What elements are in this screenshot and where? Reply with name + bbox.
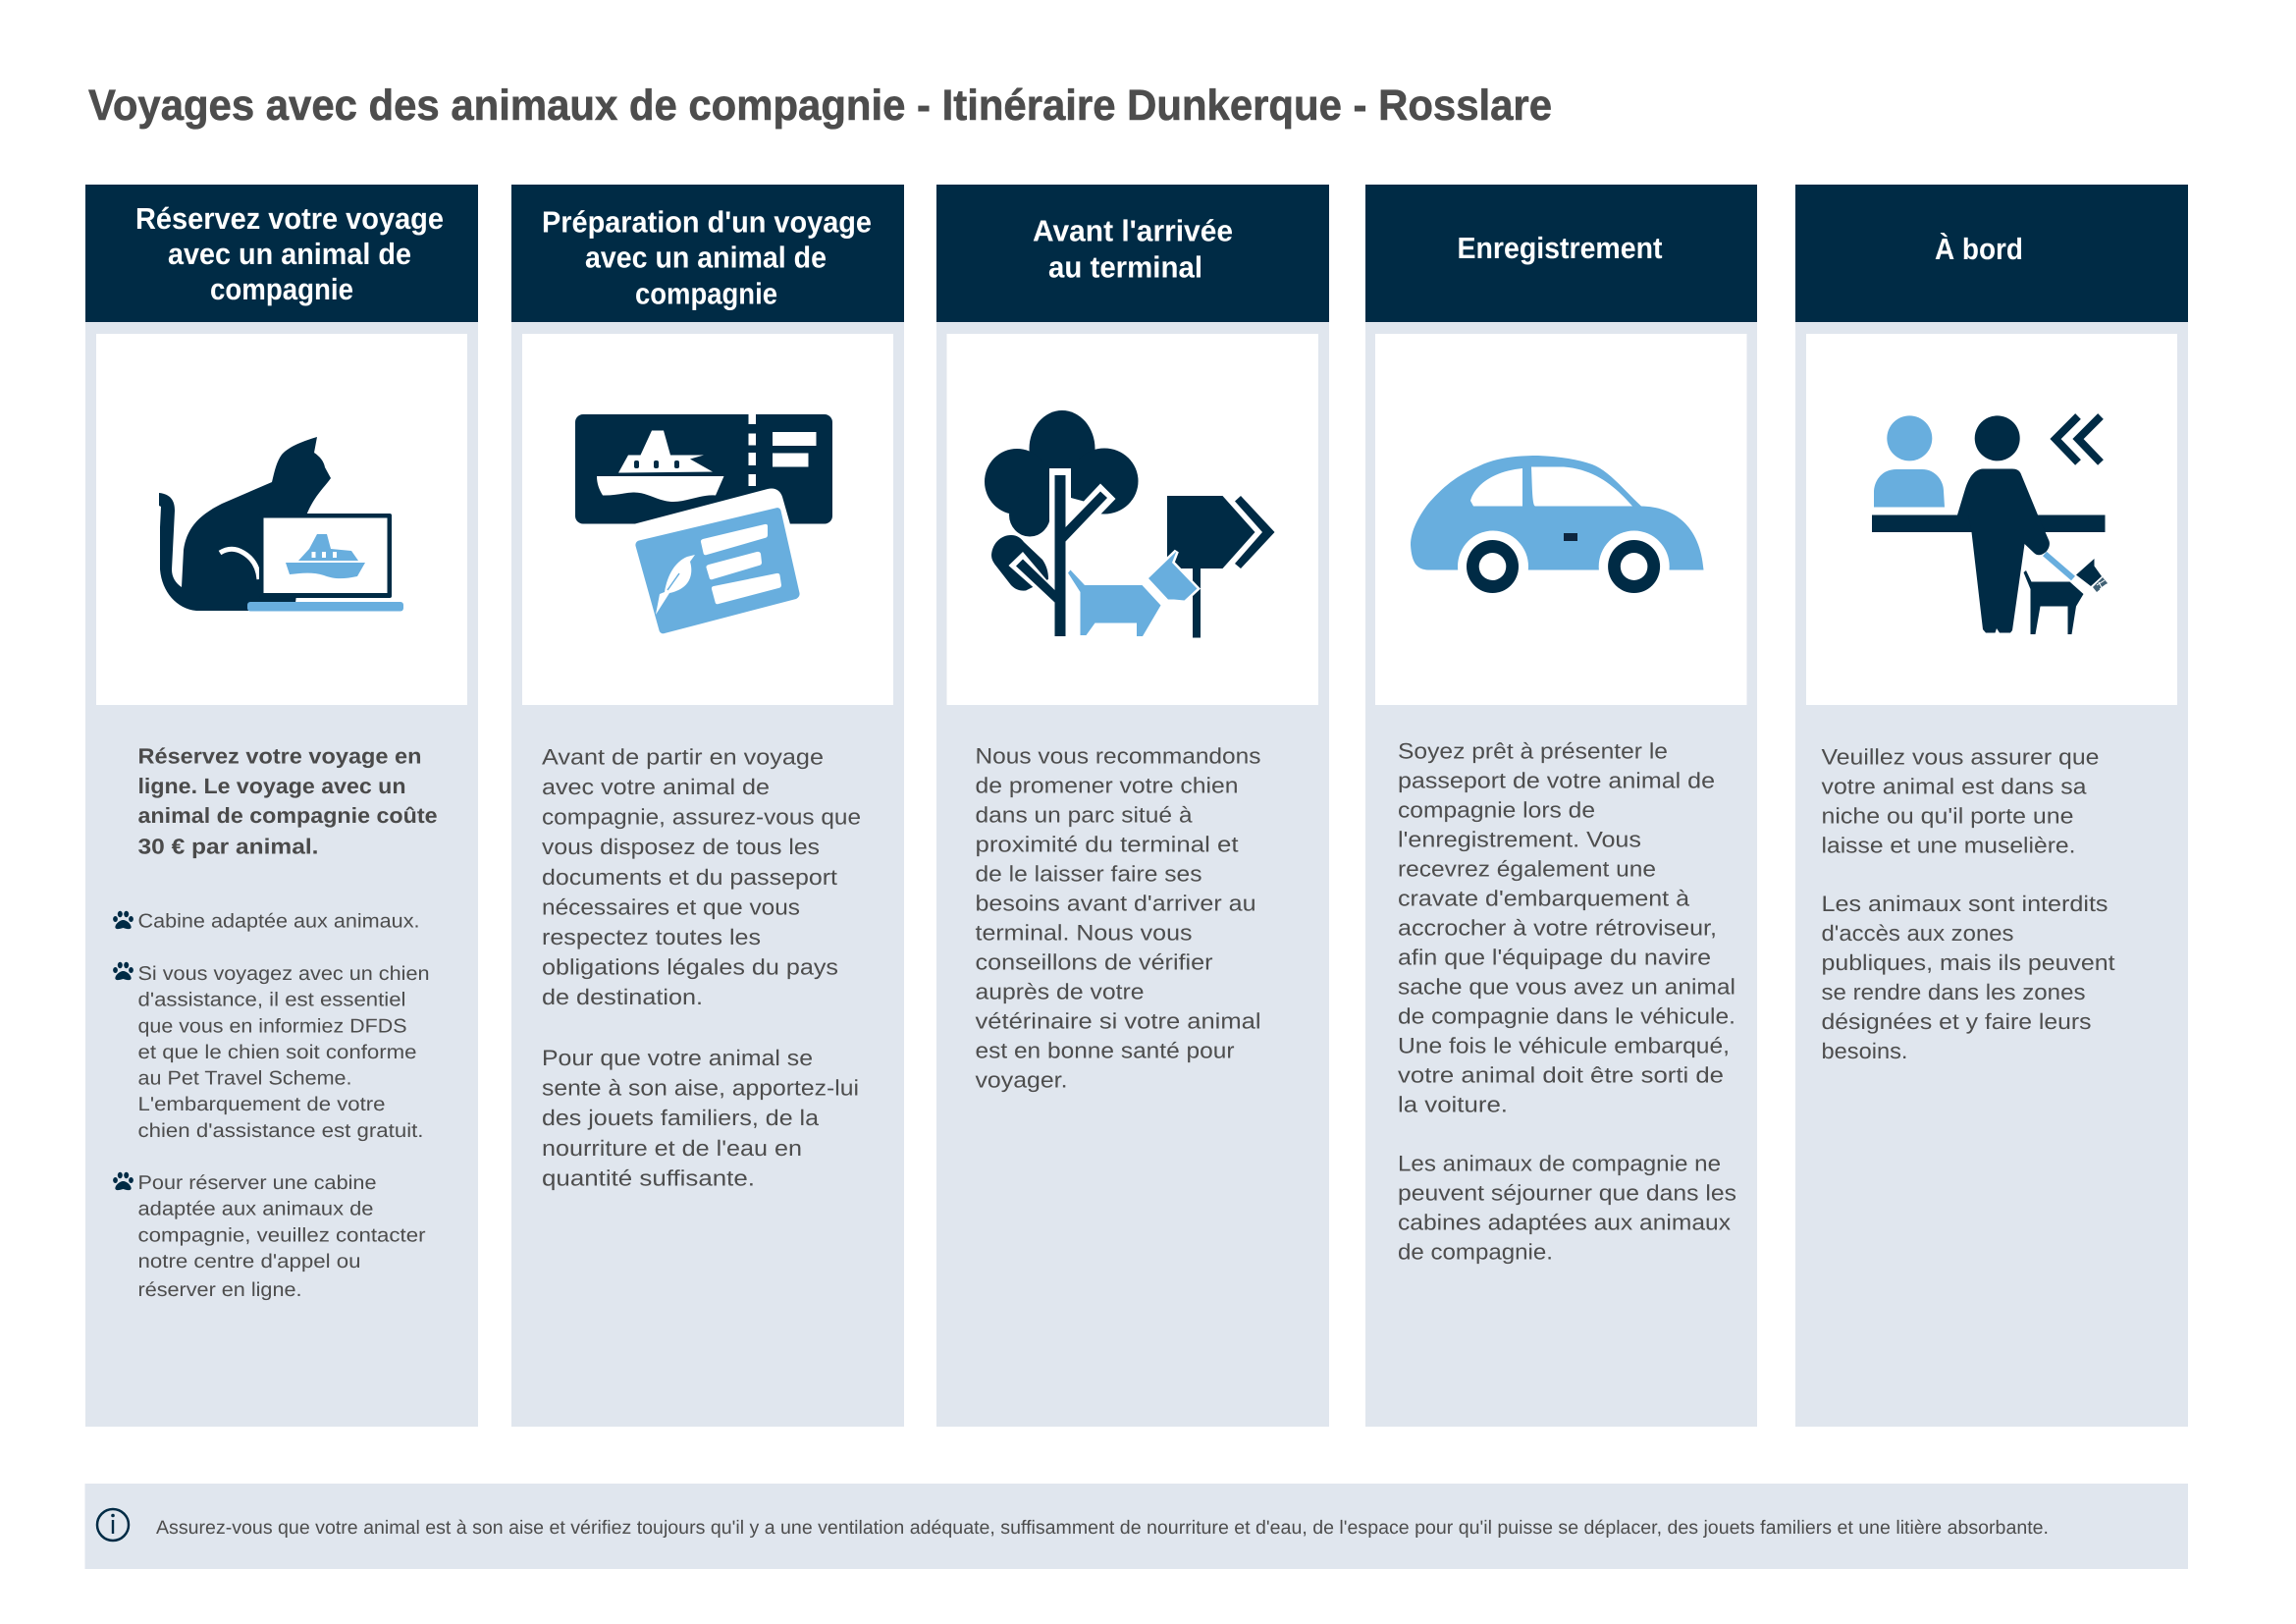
icon: ticket and pet passport xyxy=(575,414,832,633)
icon: tree, dog and sign xyxy=(985,410,1274,638)
callout: footer note xyxy=(84,1484,2188,1569)
text: enregistrement: recevrez également une xyxy=(1398,856,1656,882)
text: enregistrement: peuvent séjourner que dans les xyxy=(1398,1180,1736,1206)
text: avant l'arrivée: de promener votre chien xyxy=(976,774,1239,797)
text: réserver une cabine: compagnie, veuillez contacter xyxy=(137,1225,426,1247)
text: enregistrement: cabines adaptées aux animaux xyxy=(1398,1210,1732,1235)
text: chien d'assistance: d'assistance, il est essentiel xyxy=(137,990,406,1011)
header: réservez: compagnie xyxy=(210,273,353,306)
text: enregistrement xyxy=(1398,738,1736,1265)
text: à bord: laisse et une muselière. xyxy=(1822,833,2075,858)
text: enregistrement: accrocher à votre rétroviseur, xyxy=(1398,915,1717,941)
text: à bord: d'accès aux zones xyxy=(1822,921,2014,946)
header: avant l'arrivée xyxy=(936,185,1329,322)
text: enregistrement: l'enregistrement. Vous xyxy=(1398,827,1641,852)
text: chien d'assistance xyxy=(137,963,430,1142)
text: préparation: quantité suffisante. xyxy=(542,1166,755,1190)
text: avant l'arrivée: de le laisser faire ses xyxy=(976,862,1201,886)
header: préparation: compagnie xyxy=(635,277,777,310)
header: à bord: À bord xyxy=(1935,232,2023,266)
text: cabine: Cabine adaptée aux animaux. xyxy=(137,911,420,933)
icon: person with dog at counter xyxy=(1872,415,2108,634)
header: enregistrement: Enregistrement xyxy=(1457,232,1663,265)
text: enregistrement: de compagnie dans le véhicule. xyxy=(1398,1003,1735,1029)
icon: info xyxy=(97,1509,129,1541)
text: chien d'assistance: Si vous voyagez avec un chien xyxy=(137,963,430,985)
text: à bord: votre animal est dans sa xyxy=(1822,774,2087,799)
text: enregistrement: votre animal doit être sorti de xyxy=(1398,1062,1724,1088)
text: réserver une cabine xyxy=(137,1172,426,1301)
text: réservez, intro xyxy=(137,744,438,858)
text: avant l'arrivée: besoins avant d'arriver au xyxy=(976,892,1256,915)
text: enregistrement: cravate d'embarquement à xyxy=(1398,886,1690,911)
text: préparation: vous disposez de tous les xyxy=(542,835,820,859)
text: réservez, intro: Réservez votre voyage en xyxy=(137,744,422,768)
text: préparation: avec votre animal de xyxy=(542,775,770,799)
text: préparation: Pour que votre animal se xyxy=(542,1046,813,1070)
text: réservez, intro: ligne. Le voyage avec un xyxy=(137,774,406,798)
text: préparation: documents et du passeport xyxy=(542,865,838,890)
text: réservez, intro: animal de compagnie coûte xyxy=(137,803,438,828)
icon: paw xyxy=(113,911,133,929)
header: avant l'arrivée: au terminal xyxy=(1048,251,1202,285)
text: à bord: niche ou qu'il porte une xyxy=(1822,803,2073,829)
panel: enregistrement xyxy=(1365,185,1757,1427)
text: enregistrement: Les animaux de compagnie ne xyxy=(1398,1151,1721,1176)
text: avant l'arrivée: proximité du terminal et xyxy=(976,833,1239,856)
title: Voyages avec des animaux de compagnie - Itinéraire Dunkerque - Rosslare xyxy=(88,81,1552,130)
text: enregistrement: Soyez prêt à présenter le xyxy=(1398,738,1668,764)
text: footer note: Assurez-vous que votre animal est à son aise et vérifiez toujours qu'il y a une ventilation adéquate, suffisamment de nourriture et d'eau, de l'espace pour qu'il puisse se déplacer, des jouets familiers et une litière absorbante. xyxy=(156,1517,2049,1539)
header: avant l'arrivée: Avant l'arrivée xyxy=(1033,214,1233,247)
text: à bord: Veuillez vous assurer que xyxy=(1822,744,2099,770)
panel: à bord xyxy=(1795,185,2188,1427)
text: préparation: nourriture et de l'eau en xyxy=(542,1136,802,1161)
header: enregistrement xyxy=(1365,185,1757,322)
text: chien d'assistance: L'embarquement de votre xyxy=(137,1094,385,1115)
text: enregistrement: de compagnie. xyxy=(1398,1239,1553,1265)
text: avant l'arrivée: conseillons de vérifier xyxy=(976,950,1213,974)
text: à bord xyxy=(1822,744,2115,1063)
text: réserver une cabine: notre centre d'appel ou xyxy=(137,1251,361,1272)
text: avant l'arrivée: dans un parc situé à xyxy=(976,803,1193,827)
header: préparation: Préparation d'un voyage xyxy=(542,206,872,240)
text: avant l'arrivée xyxy=(976,744,1260,1092)
text: à bord: se rendre dans les zones xyxy=(1822,980,2085,1004)
icon: paw xyxy=(113,962,133,980)
text: avant l'arrivée: vétérinaire si votre animal xyxy=(976,1009,1260,1033)
text: préparation: nécessaires et que vous xyxy=(542,895,800,919)
text: à bord: Les animaux sont interdits xyxy=(1822,892,2109,916)
text: à bord: publiques, mais ils peuvent xyxy=(1822,950,2115,975)
text: avant l'arrivée: Nous vous recommandons xyxy=(976,744,1260,768)
text: préparation: respectez toutes les xyxy=(542,925,761,949)
text: chien d'assistance: que vous en informiez DFDS xyxy=(137,1015,406,1037)
panel: réservez xyxy=(85,185,478,1427)
text: préparation: sente à son aise, apportez-lui xyxy=(542,1076,859,1100)
header: préparation: avec un animal de xyxy=(585,242,827,275)
icon: car xyxy=(1411,456,1704,603)
panel: avant l'arrivée xyxy=(936,185,1329,1427)
text: chien d'assistance: et que le chien soit conforme xyxy=(137,1042,416,1063)
text: enregistrement: passeport de votre animal de xyxy=(1398,768,1715,793)
header: réservez: Réservez votre voyage xyxy=(135,202,444,236)
text: à bord: besoins. xyxy=(1822,1039,1908,1063)
text: préparation xyxy=(542,744,861,1190)
icon: paw xyxy=(113,1172,133,1190)
header: réservez xyxy=(85,185,478,322)
text: avant l'arrivée: auprès de votre xyxy=(976,980,1145,1003)
text: réserver une cabine: adaptée aux animaux de xyxy=(137,1198,373,1219)
text: avant l'arrivée: terminal. Nous vous xyxy=(976,921,1192,945)
text: avant l'arrivée: est en bonne santé pour xyxy=(976,1039,1235,1062)
panel: préparation xyxy=(511,185,904,1427)
text: préparation: obligations légales du pays xyxy=(542,954,838,980)
header: préparation xyxy=(511,185,904,322)
text: enregistrement: afin que l'équipage du navire xyxy=(1398,945,1711,970)
text: réservez, intro: 30 € par animal. xyxy=(137,835,318,858)
text: préparation: compagnie, assurez-vous que xyxy=(542,805,861,829)
text: à bord: désignées et y faire leurs xyxy=(1822,1009,2091,1034)
text: chien d'assistance: au Pet Travel Scheme. xyxy=(137,1068,351,1090)
text: enregistrement: compagnie lors de xyxy=(1398,797,1595,823)
text: réserver une cabine: réserver en ligne. xyxy=(137,1279,302,1301)
text: préparation: des jouets familiers, de la xyxy=(542,1106,820,1130)
text: enregistrement: Une fois le véhicule embarqué, xyxy=(1398,1033,1730,1058)
text: réserver une cabine: Pour réserver une cabine xyxy=(137,1172,377,1194)
text: chien d'assistance: chien d'assistance est gratuit. xyxy=(137,1120,424,1142)
header: à bord xyxy=(1795,185,2188,322)
header: réservez: avec un animal de xyxy=(168,238,411,271)
text: avant l'arrivée: voyager. xyxy=(976,1068,1068,1092)
text: préparation: Avant de partir en voyage xyxy=(542,744,824,770)
text: enregistrement: la voiture. xyxy=(1398,1092,1508,1117)
text: préparation: de destination. xyxy=(542,985,703,1009)
text: enregistrement: sache que vous avez un animal xyxy=(1398,974,1735,1000)
icon: cat with laptop xyxy=(159,437,403,611)
